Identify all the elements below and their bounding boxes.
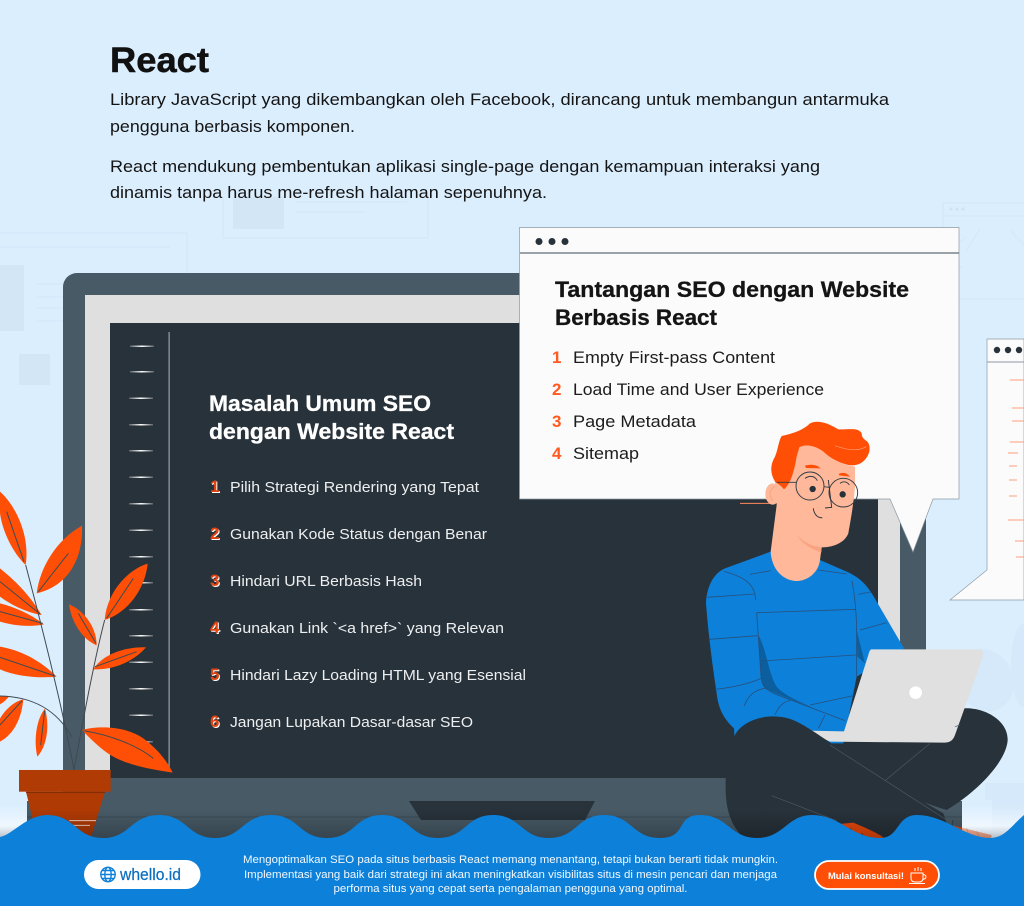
button: consultation call to action: Mulai konsultasi! [828, 871, 904, 882]
list: problem items: Pilih Strategi Rendering yang Tepat [230, 479, 480, 496]
ruler ticks [129, 332, 170, 767]
list: challenge numbers: 4 [552, 444, 562, 463]
background: faint window shapes [0, 197, 1024, 385]
intro paragraph 2 [110, 157, 820, 202]
shoes [839, 820, 992, 845]
plant pot [19, 770, 111, 838]
list: problem numbers: 2 [210, 524, 219, 543]
intro paragraph 1 [110, 90, 890, 136]
list: challenge items: Empty First-pass Content [573, 348, 775, 367]
sweater [706, 552, 904, 743]
list: problem items: Jangan Lupakan Dasar-dasar SEO [230, 714, 473, 731]
title: React [110, 41, 209, 80]
list: problem numbers: 2 [211, 525, 220, 544]
heading: SEO challenges: Tantangan SEO dengan Website [555, 277, 909, 302]
list: problem items: Hindari URL Berbasis Hash [230, 573, 422, 590]
faded plant behind the person [945, 623, 1024, 830]
list: problem numbers: 1 [210, 477, 219, 496]
front leg [726, 716, 947, 840]
footer text [243, 854, 778, 895]
list: problem numbers: 4 [210, 618, 220, 637]
logo: whello.id [84, 860, 200, 889]
footer wave band [0, 815, 1024, 906]
list: problem numbers: 3 [211, 572, 220, 591]
monitor stand [409, 801, 595, 820]
intro paragraph 1: Library JavaScript yang dikembangkan oleh Facebook, dirancang untuk membangun antarmuka [110, 90, 890, 109]
list: problem items: Gunakan Kode Status dengan Benar [230, 526, 487, 543]
list: problem numbers: 3 [210, 571, 219, 590]
list: problem items: Gunakan Link `<a href>` yang Relevan [230, 620, 504, 637]
shadow above the wave [0, 805, 1024, 840]
list: problem numbers: 4 [211, 619, 221, 638]
list: challenge items [573, 348, 824, 463]
list: challenge numbers: 3 [552, 412, 561, 431]
footer text: performa situs yang cepat serta pengalaman pengguna yang optimal. [334, 883, 688, 895]
panel: common SEO problems [209, 391, 526, 732]
heading: SEO challenges [555, 277, 909, 330]
list: problem items [230, 479, 526, 731]
back leg [830, 708, 1008, 810]
illustration: person with laptop [706, 422, 1008, 845]
heading: SEO challenges: Berbasis React [555, 305, 717, 330]
heading: common problems: Masalah Umum SEO [209, 391, 431, 416]
laptop [807, 649, 983, 743]
list: challenge numbers: 2 [552, 380, 561, 399]
icon: globe [101, 867, 115, 882]
footer text: Mengoptimalkan SEO pada situs berbasis React memang menantang, tetapi bukan berarti tidak mungkin. [243, 854, 778, 866]
logo: whello.id: whello.id [119, 865, 181, 884]
head [765, 422, 870, 581]
intro paragraph 1: pengguna berbasis komponen. [110, 117, 355, 136]
monitor [27, 273, 962, 846]
list: challenge items: Page Metadata [573, 412, 697, 431]
footer text: Implementasi yang baik dari strategi ini akan meningkatkan visibilitas situs di mesin pencari dan menjaga [244, 869, 777, 881]
icon: coffee cup [909, 867, 926, 884]
list: problem numbers: 5 [211, 666, 220, 685]
list: challenge items: Load Time and User Experience [573, 380, 824, 399]
intro paragraph 2: dinamis tanpa harus me-refresh halaman sepenuhnya. [110, 183, 547, 202]
list: problem numbers: 1 [211, 478, 220, 497]
list: problem numbers [210, 477, 221, 732]
list: problem numbers: 6 [211, 713, 220, 732]
list: problem items: Hindari Lazy Loading HTML yang Esensial [230, 667, 526, 684]
list: challenge numbers: 1 [552, 348, 561, 367]
speech bubble: SEO challenges [520, 228, 959, 552]
illustration: potted plant [0, 492, 173, 838]
list: problem numbers: 6 [210, 712, 219, 731]
list: challenge items: Sitemap [573, 444, 639, 463]
hair [771, 422, 870, 489]
speech bubble: right window [950, 339, 1024, 600]
heading: common problems: dengan Website React [209, 419, 455, 444]
intro paragraph 2: React mendukung pembentukan aplikasi single-page dengan kemampuan interaksi yang [110, 157, 820, 176]
heading: common problems [209, 391, 455, 444]
button: consultation call to action [815, 861, 939, 889]
list: challenge numbers [552, 348, 562, 463]
glasses [777, 472, 858, 507]
list: problem numbers: 5 [210, 665, 219, 684]
